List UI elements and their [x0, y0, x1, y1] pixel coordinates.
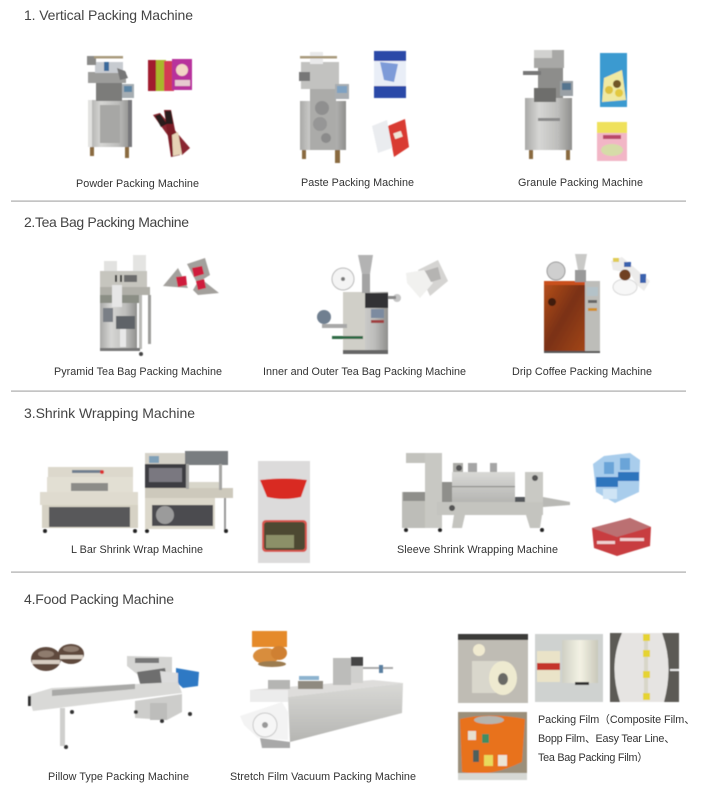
caption: stretch film: Stretch Film Vacuum Packing Machine: [230, 771, 416, 783]
panel: shrink wrapping machine: [24, 405, 651, 563]
machine: stretch film vacuum: [240, 657, 403, 748]
machine: powder packing: [87, 56, 134, 158]
heading: food packing: 4.Food Packing Machine: [24, 591, 174, 607]
product: pyramid tea bags: [163, 258, 219, 295]
text block: packing film description: Bopp Film、Easy Tear Line、: [538, 733, 675, 745]
product: tea bag pouch: [406, 260, 448, 298]
caption: drip coffee: Drip Coffee Packing Machine: [512, 366, 652, 378]
caption: pyramid: Pyramid Tea Bag Packing Machine: [54, 366, 222, 378]
caption: L bar: L Bar Shrink Wrap Machine: [71, 544, 203, 556]
machine: granule packing: [523, 50, 573, 160]
heading: tea bag: 2.Tea Bag Packing Machine: [24, 214, 189, 230]
product: water bottle pack: [593, 453, 640, 503]
photo: clear film roll: [535, 634, 603, 702]
product: powder sachets: [148, 59, 192, 91]
machine: shrink tunnel: [40, 467, 138, 533]
caption: granule: Granule Packing Machine: [518, 177, 643, 189]
product: paste sachets: [372, 51, 409, 157]
heading: shrink wrapping: 3.Shrink Wrapping Machine: [24, 405, 195, 421]
product: drip coffee pack: [611, 257, 650, 295]
heading: vertical packing machine: 1. Vertical Packing Machine: [24, 7, 193, 23]
panel: vertical packing machine: [24, 7, 643, 190]
machine: sleeve shrink: [402, 453, 570, 532]
product: packaged bread: [252, 631, 287, 667]
caption: pillow: Pillow Type Packing Machine: [48, 771, 189, 783]
text block: packing film description: Packing Film（Composite Film、: [538, 713, 695, 726]
panel: food packing machine: [24, 591, 695, 783]
caption: sleeve: Sleeve Shrink Wrapping Machine: [397, 544, 558, 556]
product: granule bag blue: [600, 53, 627, 107]
photo: easy tear film: [610, 633, 679, 702]
text block: packing film description: [538, 713, 695, 764]
photo: printed orange film roll: [458, 712, 527, 780]
product: trays photo: [258, 461, 310, 563]
product: biscuits: [31, 644, 84, 671]
machine: L bar sealer: [145, 451, 233, 533]
machine: pyramid tea bag: [100, 255, 151, 356]
machine: drip coffee: [544, 254, 600, 353]
machine: paste packing: [299, 52, 349, 163]
caption: powder: Powder Packing Machine: [76, 178, 199, 190]
machine: inner and outer tea bag: [317, 255, 401, 354]
panel: tea bag packing machine: [24, 214, 652, 378]
photo: film roll on machine: [458, 634, 528, 703]
text block: packing film description: Tea Bag Packing Film）: [538, 751, 648, 764]
caption: inner outer: Inner and Outer Tea Bag Packing Machine: [263, 366, 466, 378]
machine: pillow type: [28, 656, 199, 749]
product: cola can pack: [592, 518, 651, 556]
product: powder sticks: [153, 110, 190, 157]
product: granule bag pink: [597, 122, 627, 161]
caption: paste: Paste Packing Machine: [301, 177, 414, 189]
